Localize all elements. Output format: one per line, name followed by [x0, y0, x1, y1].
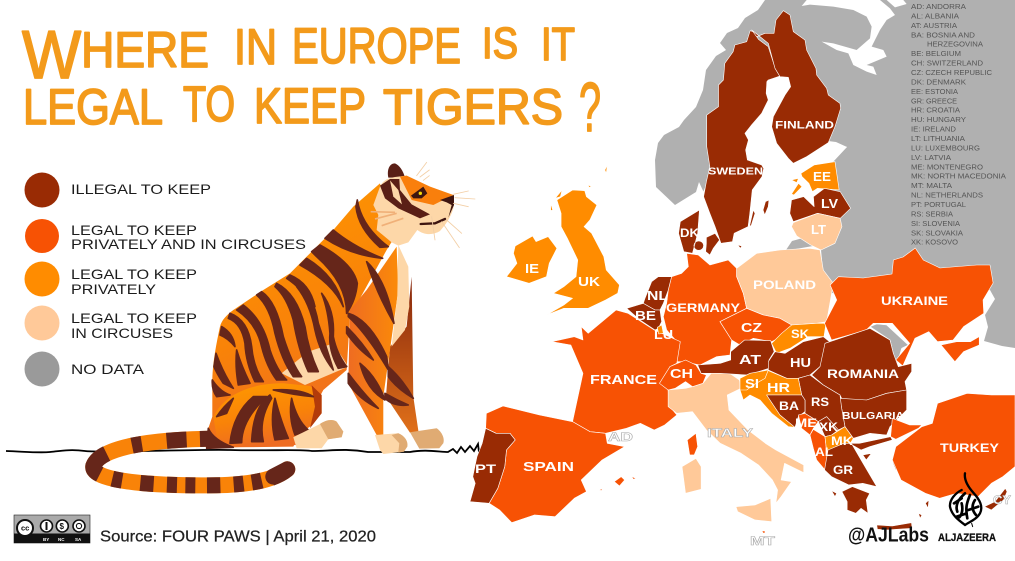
legend item: legal privately: [24, 262, 197, 297]
icon: creative commons badge: cc: [21, 524, 29, 532]
map labels: SPAIN: [523, 460, 574, 474]
country code key: IE: IRELAND: [911, 125, 957, 134]
near front paw: [375, 433, 407, 454]
head shape: [373, 176, 454, 246]
map labels: PT: [475, 462, 497, 476]
country code key: CH: SWITZERLAND: [911, 59, 984, 68]
Latvia: [790, 188, 851, 222]
Al Jazeera wordmark: ALJAZEERA: [938, 532, 996, 544]
country code key: HERZEGOVINA: [927, 40, 984, 49]
cheek fur: [371, 212, 403, 226]
title: HERE: [81, 22, 209, 78]
title: LEGAL: [23, 79, 163, 135]
map of Europe: [470, 0, 1015, 533]
country code key: HU: HUNGARY: [911, 115, 966, 124]
title: IT: [541, 18, 575, 70]
Switzerland: [659, 360, 706, 390]
tiger tail: [93, 439, 287, 485]
face markings: [380, 179, 430, 218]
country code key: MK: NORTH MACEDONIA: [911, 172, 1007, 181]
hind paw: [293, 420, 343, 448]
legend item: illegal to keep: [24, 172, 211, 208]
map labels: AL: [815, 445, 833, 459]
eye: [411, 187, 427, 198]
legend item: legal privately: LEGAL TO KEEP: [71, 266, 197, 282]
country code key: EE: ESTONIA: [911, 87, 959, 96]
Montenegro: [798, 413, 818, 435]
Lithuania: [792, 213, 842, 250]
map labels: ME: [795, 416, 817, 430]
Swedish islands: [750, 200, 769, 227]
country code key: HR: CROATIA: [911, 106, 961, 115]
icon: creative commons badge: $: [60, 522, 64, 531]
icon: creative commons badge: NC: [58, 537, 65, 542]
Spain: [486, 406, 636, 523]
map labels: IE: [525, 262, 539, 276]
Slovakia: [772, 323, 826, 353]
icon: creative commons badge: [14, 515, 90, 543]
title: [22, 17, 601, 146]
map labels: POLAND: [753, 278, 816, 292]
icon: creative commons badge: BY: [43, 537, 49, 542]
Poland: [737, 248, 833, 325]
icon: Al Jazeera logo mark: [950, 473, 981, 527]
country code key: SK: SLOVAKIA: [911, 228, 964, 237]
map labels: AD: [608, 430, 633, 444]
France: [552, 310, 698, 455]
map labels: DK: [680, 228, 700, 240]
country code key: PT: PORTUGAL: [911, 200, 966, 209]
country code key: AD: ANDORRA: [911, 2, 967, 11]
legend item: legal privately and in circuses: LEGAL TO KEEP: [71, 222, 197, 238]
Italy: [668, 371, 804, 522]
Bosnia and Herzegovina: [767, 395, 805, 427]
country code key: LU: LUXEMBOURG: [911, 144, 980, 152]
title: W: [22, 17, 81, 93]
Baltic Sea and Gulf of Bothnia: [700, 70, 847, 262]
white sea and Barents coast: [802, 0, 907, 75]
map labels: LT: [811, 223, 826, 237]
legend: [24, 172, 306, 386]
map labels: CZ: [741, 321, 762, 335]
mouth: [421, 219, 445, 224]
forehead: [400, 176, 453, 205]
country code key: MT: MALTA: [911, 181, 953, 190]
map labels: BULGARIA: [842, 411, 904, 422]
country code key: DK: DENMARK: [911, 77, 966, 86]
map labels: UKRAINE: [881, 294, 948, 308]
legend item: no data: [24, 352, 145, 386]
whiskers: [417, 162, 475, 248]
title: KEEP: [254, 78, 366, 134]
Ukraine: [825, 248, 993, 366]
map labels: SWEDEN: [708, 166, 763, 178]
country code key: GR: GREECE: [911, 96, 957, 105]
map labels: UK: [578, 274, 601, 289]
map labels: FRANCE: [590, 373, 657, 387]
legend item: illegal to keep: ILLEGAL TO KEEP: [71, 181, 211, 197]
country code key: CZ: CZECH REPUBLIC: [911, 68, 993, 77]
legend item: legal in circuses: [24, 306, 197, 341]
Greece: [825, 437, 929, 530]
icon: creative commons badge: SA: [75, 537, 82, 542]
Portugal: [470, 428, 515, 503]
country code key: XK: KOSOVO: [911, 238, 958, 247]
legend item: legal privately and in circuses: [25, 219, 306, 253]
near foreleg: [348, 247, 398, 436]
Hungary: [768, 337, 832, 378]
tiger head: [371, 162, 475, 248]
map labels: BA: [779, 399, 799, 413]
title: TO: [183, 76, 235, 132]
Kosovo: [818, 417, 838, 437]
Finland: [752, 11, 841, 163]
map labels: LU: [654, 328, 673, 342]
far foreleg: [386, 277, 419, 433]
hind thigh: [213, 383, 322, 447]
map labels: ROMANIA: [827, 367, 899, 381]
Moldova: [870, 324, 908, 365]
Croatia: [740, 370, 802, 427]
map labels: SI: [745, 377, 759, 391]
Romania: [812, 328, 912, 402]
Czech Republic: [720, 308, 792, 345]
map labels: CY: [993, 493, 1011, 507]
Slovenia: [740, 370, 768, 390]
map labels: HU: [790, 356, 811, 370]
Denmark: [679, 210, 742, 255]
Austria: [698, 340, 774, 375]
Ireland: [506, 236, 557, 283]
country code key: BE: BELGIUM: [911, 49, 961, 58]
map labels: MK: [831, 434, 853, 448]
map labels: [475, 120, 1011, 548]
source line: Source: FOUR PAWS | April 21, 2020: [100, 528, 376, 546]
Germany: [663, 253, 747, 365]
map labels: EE: [813, 170, 831, 184]
legend item: legal privately and in circuses: PRIVATELY AND IN CIRCUSES: [71, 236, 306, 252]
map labels: XK: [819, 420, 838, 434]
map labels: NL: [647, 289, 668, 303]
map labels: GR: [833, 463, 853, 477]
Estonia: [792, 162, 839, 195]
map labels: HR: [767, 381, 790, 395]
nose: [440, 195, 454, 218]
title: IN: [234, 19, 277, 75]
country code key: [911, 2, 1007, 247]
gray land: Norway, Russia, Belarus: [655, 0, 1015, 348]
Cyprus: [984, 488, 1007, 510]
map labels: LV: [821, 197, 839, 211]
title: IS: [482, 19, 518, 68]
map labels: MT: [750, 534, 776, 548]
map labels: SK: [791, 327, 809, 341]
Serbia: [798, 375, 845, 430]
title: ?: [579, 68, 601, 146]
Turkey: [891, 393, 1015, 498]
map labels: FINLAND: [775, 120, 834, 132]
Netherlands: [643, 277, 672, 310]
legend item: legal in circuses: LEGAL TO KEEP: [71, 310, 197, 326]
Kaliningrad: [786, 236, 813, 250]
tiger body: [208, 183, 395, 447]
legend item: no data: NO DATA: [71, 361, 145, 377]
map labels: AT: [739, 352, 761, 367]
country code key: ME: MONTENEGRO: [911, 162, 983, 171]
map labels: RS: [811, 395, 829, 409]
map labels: ITALY: [707, 426, 753, 440]
far paw: [410, 428, 444, 449]
North Macedonia: [825, 427, 853, 452]
Sweden: [704, 31, 780, 243]
tiger stripes: [207, 200, 413, 448]
ground line: [6, 444, 479, 453]
country code key: LV: LATVIA: [911, 153, 952, 162]
Luxembourg: [657, 325, 663, 334]
legend item: legal privately: PRIVATELY: [71, 281, 157, 297]
map labels: TURKEY: [940, 441, 999, 455]
country code key: BA: BOSNIA AND: [911, 30, 976, 39]
country code key: SI: SLOVENIA: [911, 219, 961, 228]
chest: [392, 245, 409, 347]
Bulgaria: [840, 390, 907, 438]
country code key: RS: SERBIA: [911, 210, 954, 218]
legend item: legal in circuses: IN CIRCUSES: [71, 325, 173, 341]
Belgium: [627, 303, 662, 330]
country code key: AT: AUSTRIA: [911, 21, 958, 30]
country code key: NL: NETHERLANDS: [911, 191, 983, 200]
title: TIGERS: [383, 79, 563, 135]
country code key: AL: ALBANIA: [911, 11, 960, 20]
map labels: GERMANY: [666, 301, 740, 315]
country code key: LT: LITHUANIA: [911, 134, 966, 143]
illustration: tiger: [93, 183, 444, 485]
ear: [388, 163, 405, 178]
Albania: [810, 429, 832, 470]
United Kingdom: [546, 165, 619, 315]
title: EUROPE: [292, 18, 461, 74]
Malta: [762, 531, 765, 533]
map labels: BE: [635, 309, 656, 323]
belly: [282, 343, 348, 385]
AJLabs handle: @AJLabs: [848, 524, 929, 546]
map labels: CH: [670, 367, 693, 381]
